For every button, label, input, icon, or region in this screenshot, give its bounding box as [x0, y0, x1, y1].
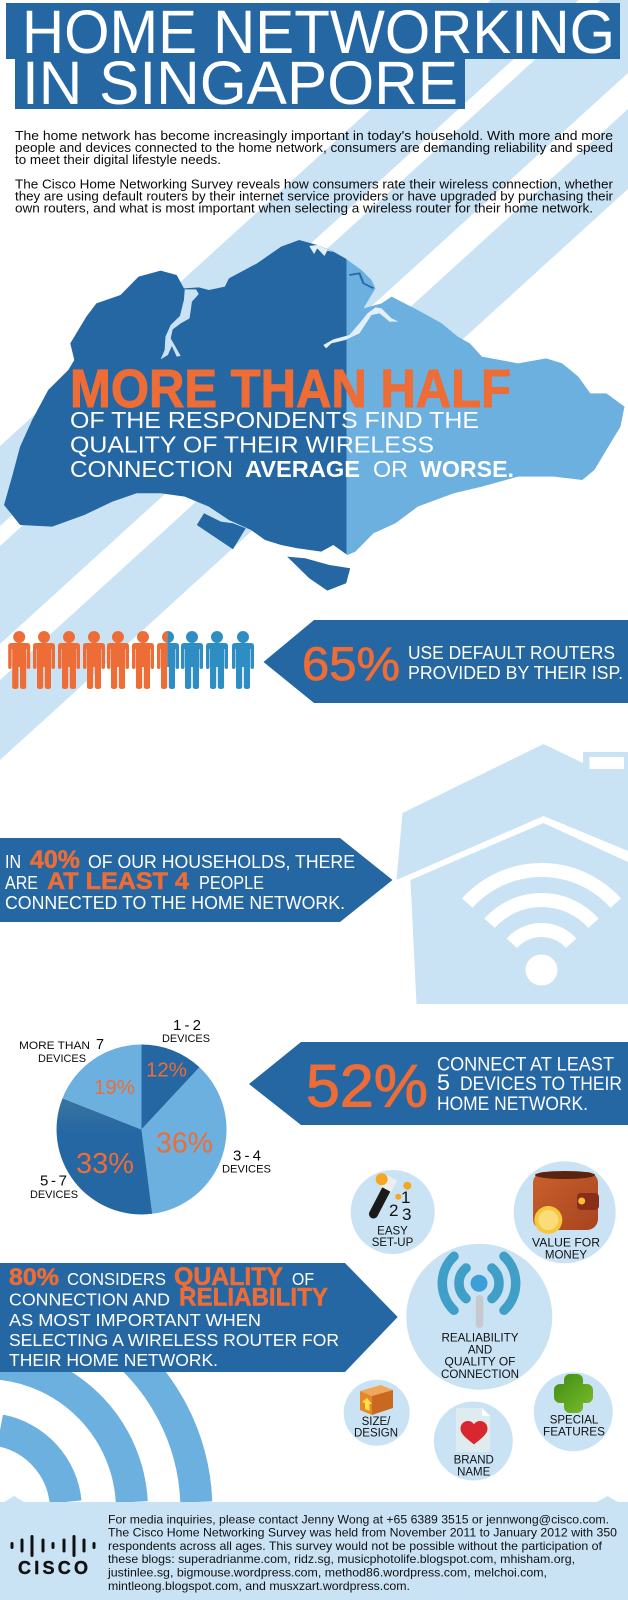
icon: green plus — [554, 1374, 593, 1413]
circle: reliability and quality: AND — [468, 1344, 492, 1356]
footer panel — [0, 1496, 628, 1600]
banner: 80%: THEIR HOME NETWORK. — [9, 1350, 218, 1370]
banner: 40% of households: CONNECTED TO THE HOME NETWORK. — [5, 892, 345, 913]
headline: more than half: OF THE RESPONDENTS FIND THE — [70, 407, 479, 433]
circle: value for money: MONEY — [545, 1250, 587, 1262]
pie chart: devices per household: DEVICES — [222, 1164, 271, 1176]
people pictogram — [8, 631, 254, 689]
icon: document with heart — [456, 1408, 490, 1452]
circle: easy set-up — [351, 1170, 435, 1254]
cisco logo — [10, 1535, 96, 1578]
footer text: justinlee.sg, bigmouse.wordpress.com, method86.wordpress.com, melchoi.com, — [107, 1565, 547, 1579]
intro text: they are using default routers by their internet service providers or have upgraded by purchasing their — [15, 188, 614, 204]
banner: 40% of households: AT LEAST 4 — [47, 868, 190, 895]
banner: 80%: QUALITY — [174, 1263, 283, 1291]
house with wifi — [396, 744, 628, 1004]
banner: 40% of households: ARE — [5, 872, 38, 893]
footer text — [107, 1512, 617, 1593]
intro text — [15, 128, 614, 216]
pie chart: devices per household: DEVICES — [30, 1189, 78, 1201]
headline: more than half: OR — [373, 456, 408, 482]
headline: more than half — [70, 360, 514, 482]
circle: reliability and quality: REALIABILITY — [442, 1333, 519, 1345]
banner: 40% of households — [0, 838, 392, 922]
circle: size and design — [344, 1380, 410, 1446]
icon: magic wand: 2 — [389, 1201, 398, 1220]
circle: size and design: DESIGN — [354, 1428, 398, 1440]
circle: easy set-up: SET-UP — [372, 1237, 414, 1249]
circle: brand name: NAME — [457, 1467, 491, 1479]
circle: reliability and quality: CONNECTION — [441, 1369, 519, 1381]
circle: value for money: VALUE FOR — [532, 1238, 600, 1250]
circle: special features: FEATURES — [543, 1427, 605, 1439]
intro text: own routers, and what is most important when selecting a wireless router for their home network. — [15, 200, 593, 216]
banner: 80%: AS MOST IMPORTANT WHEN — [9, 1310, 261, 1330]
footer text: For media inquiries, please contact Jenny Wong at +65 6389 3515 or jennwong@cisco.com. — [108, 1512, 609, 1526]
pie chart: devices per household: 36% — [156, 1128, 213, 1160]
title — [6, 0, 620, 117]
pie chart: devices per household: 1-2 — [173, 1017, 201, 1034]
title: IN SINGAPORE — [22, 49, 458, 117]
pie chart: devices per household: 5-7 — [40, 1173, 67, 1190]
headline: more than half: QUALITY OF THEIR WIRELESS — [70, 432, 434, 458]
cisco logo: CISCO — [18, 1558, 88, 1578]
circle: easy set-up: EASY — [377, 1225, 408, 1237]
banner: 65%: PROVIDED BY THEIR ISP. — [408, 663, 623, 683]
banner: 80%: RELIABILITY — [179, 1284, 328, 1312]
banner: 40% of households: PEOPLE — [199, 872, 264, 893]
banner: 80%: 80% — [9, 1264, 59, 1291]
headline: more than half: MORE THAN HALF — [70, 360, 511, 419]
banner: 65%: 65% — [302, 637, 400, 690]
concentric wifi arcs — [0, 1340, 196, 1502]
pie chart: devices per household: 7 — [96, 1036, 104, 1053]
pie chart: devices per household: DEVICES — [162, 1033, 210, 1045]
footer text: respondents across all ages. This survey would not be possible without the participation of — [108, 1539, 603, 1553]
banner: 80%: OF — [292, 1269, 314, 1289]
pie chart: devices per household: 3-4 — [233, 1148, 261, 1165]
headline: more than half: WORSE. — [420, 456, 514, 482]
pie chart: devices per household: MORE THAN — [19, 1040, 90, 1052]
circle: value for money — [514, 1161, 616, 1263]
icon: box — [360, 1385, 393, 1415]
pie chart: devices per household — [19, 1017, 271, 1214]
headline: more than half: CONNECTION — [70, 456, 233, 482]
icon: wallet and coin — [533, 1171, 599, 1234]
intro text: The home network has become increasingly important in today's household. With more and more — [15, 128, 613, 143]
banner: 40% of households: 40% — [30, 846, 80, 874]
banner: 52% — [249, 1042, 628, 1125]
intro text: to meet their digital lifestyle needs. — [15, 152, 221, 167]
headline: more than half: AVERAGE — [245, 456, 360, 482]
icon: magic wand: 3 — [402, 1205, 411, 1224]
banner: 40% of households: OF OUR HOUSEHOLDS, THERE — [88, 851, 355, 872]
pie chart: devices per household: 19% — [94, 1077, 135, 1099]
pie chart: devices per household: DEVICES — [38, 1053, 86, 1065]
icon: wireless antenna — [442, 1256, 516, 1328]
map of Singapore — [4, 240, 624, 591]
circle: size and design: SIZE/ — [362, 1416, 391, 1428]
pie chart: devices per household: 12% — [146, 1060, 187, 1082]
banner: 65% — [264, 620, 628, 703]
background diagonal stripes — [0, 0, 628, 760]
circle: special features: SPECIAL — [550, 1414, 599, 1426]
intro text: people and devices connected to the home network, consumers are demanding reliability and speed — [15, 140, 613, 155]
banner: 65%: USE DEFAULT ROUTERS — [408, 643, 615, 663]
circle: reliability and quality: QUALITY OF — [444, 1357, 516, 1369]
circle: brand name: BRAND — [454, 1454, 494, 1466]
banner: 80%: CONSIDERS — [67, 1269, 166, 1289]
footer text: The Cisco Home Networking Survey was held from November 2011 to January 2012 with 350 — [108, 1526, 617, 1540]
banner: 52%: HOME NETWORK. — [437, 1094, 588, 1115]
banner: 52%: 52% — [306, 1053, 428, 1120]
banner: 52%: CONNECT AT LEAST — [437, 1055, 614, 1076]
footer text: these blogs: superadrianme.com, ridz.sg, musicphotolife.blogspot.com, mhisham.org, — [108, 1552, 575, 1566]
icon: magic wand: 1 — [401, 1188, 410, 1207]
circle: special features — [534, 1372, 613, 1451]
pie chart: devices per household: 33% — [76, 1148, 134, 1180]
banner: 52%: 5 — [437, 1070, 450, 1095]
banner: 80%: CONNECTION AND — [9, 1290, 170, 1310]
banner: 80%: SELECTING A WIRELESS ROUTER FOR — [9, 1330, 339, 1350]
circle: reliability and quality — [406, 1244, 552, 1390]
banner: 80% — [0, 1263, 398, 1372]
intro text: The Cisco Home Networking Survey reveals how consumers rate their wireless connection, whether — [15, 176, 614, 192]
footer text: mintleong.blogspot.com, and musxzart.wordpress.com. — [108, 1579, 410, 1593]
icon: magic wand — [374, 1173, 411, 1224]
banner: 40% of households: IN — [5, 851, 21, 872]
circle: brand name — [434, 1402, 513, 1480]
